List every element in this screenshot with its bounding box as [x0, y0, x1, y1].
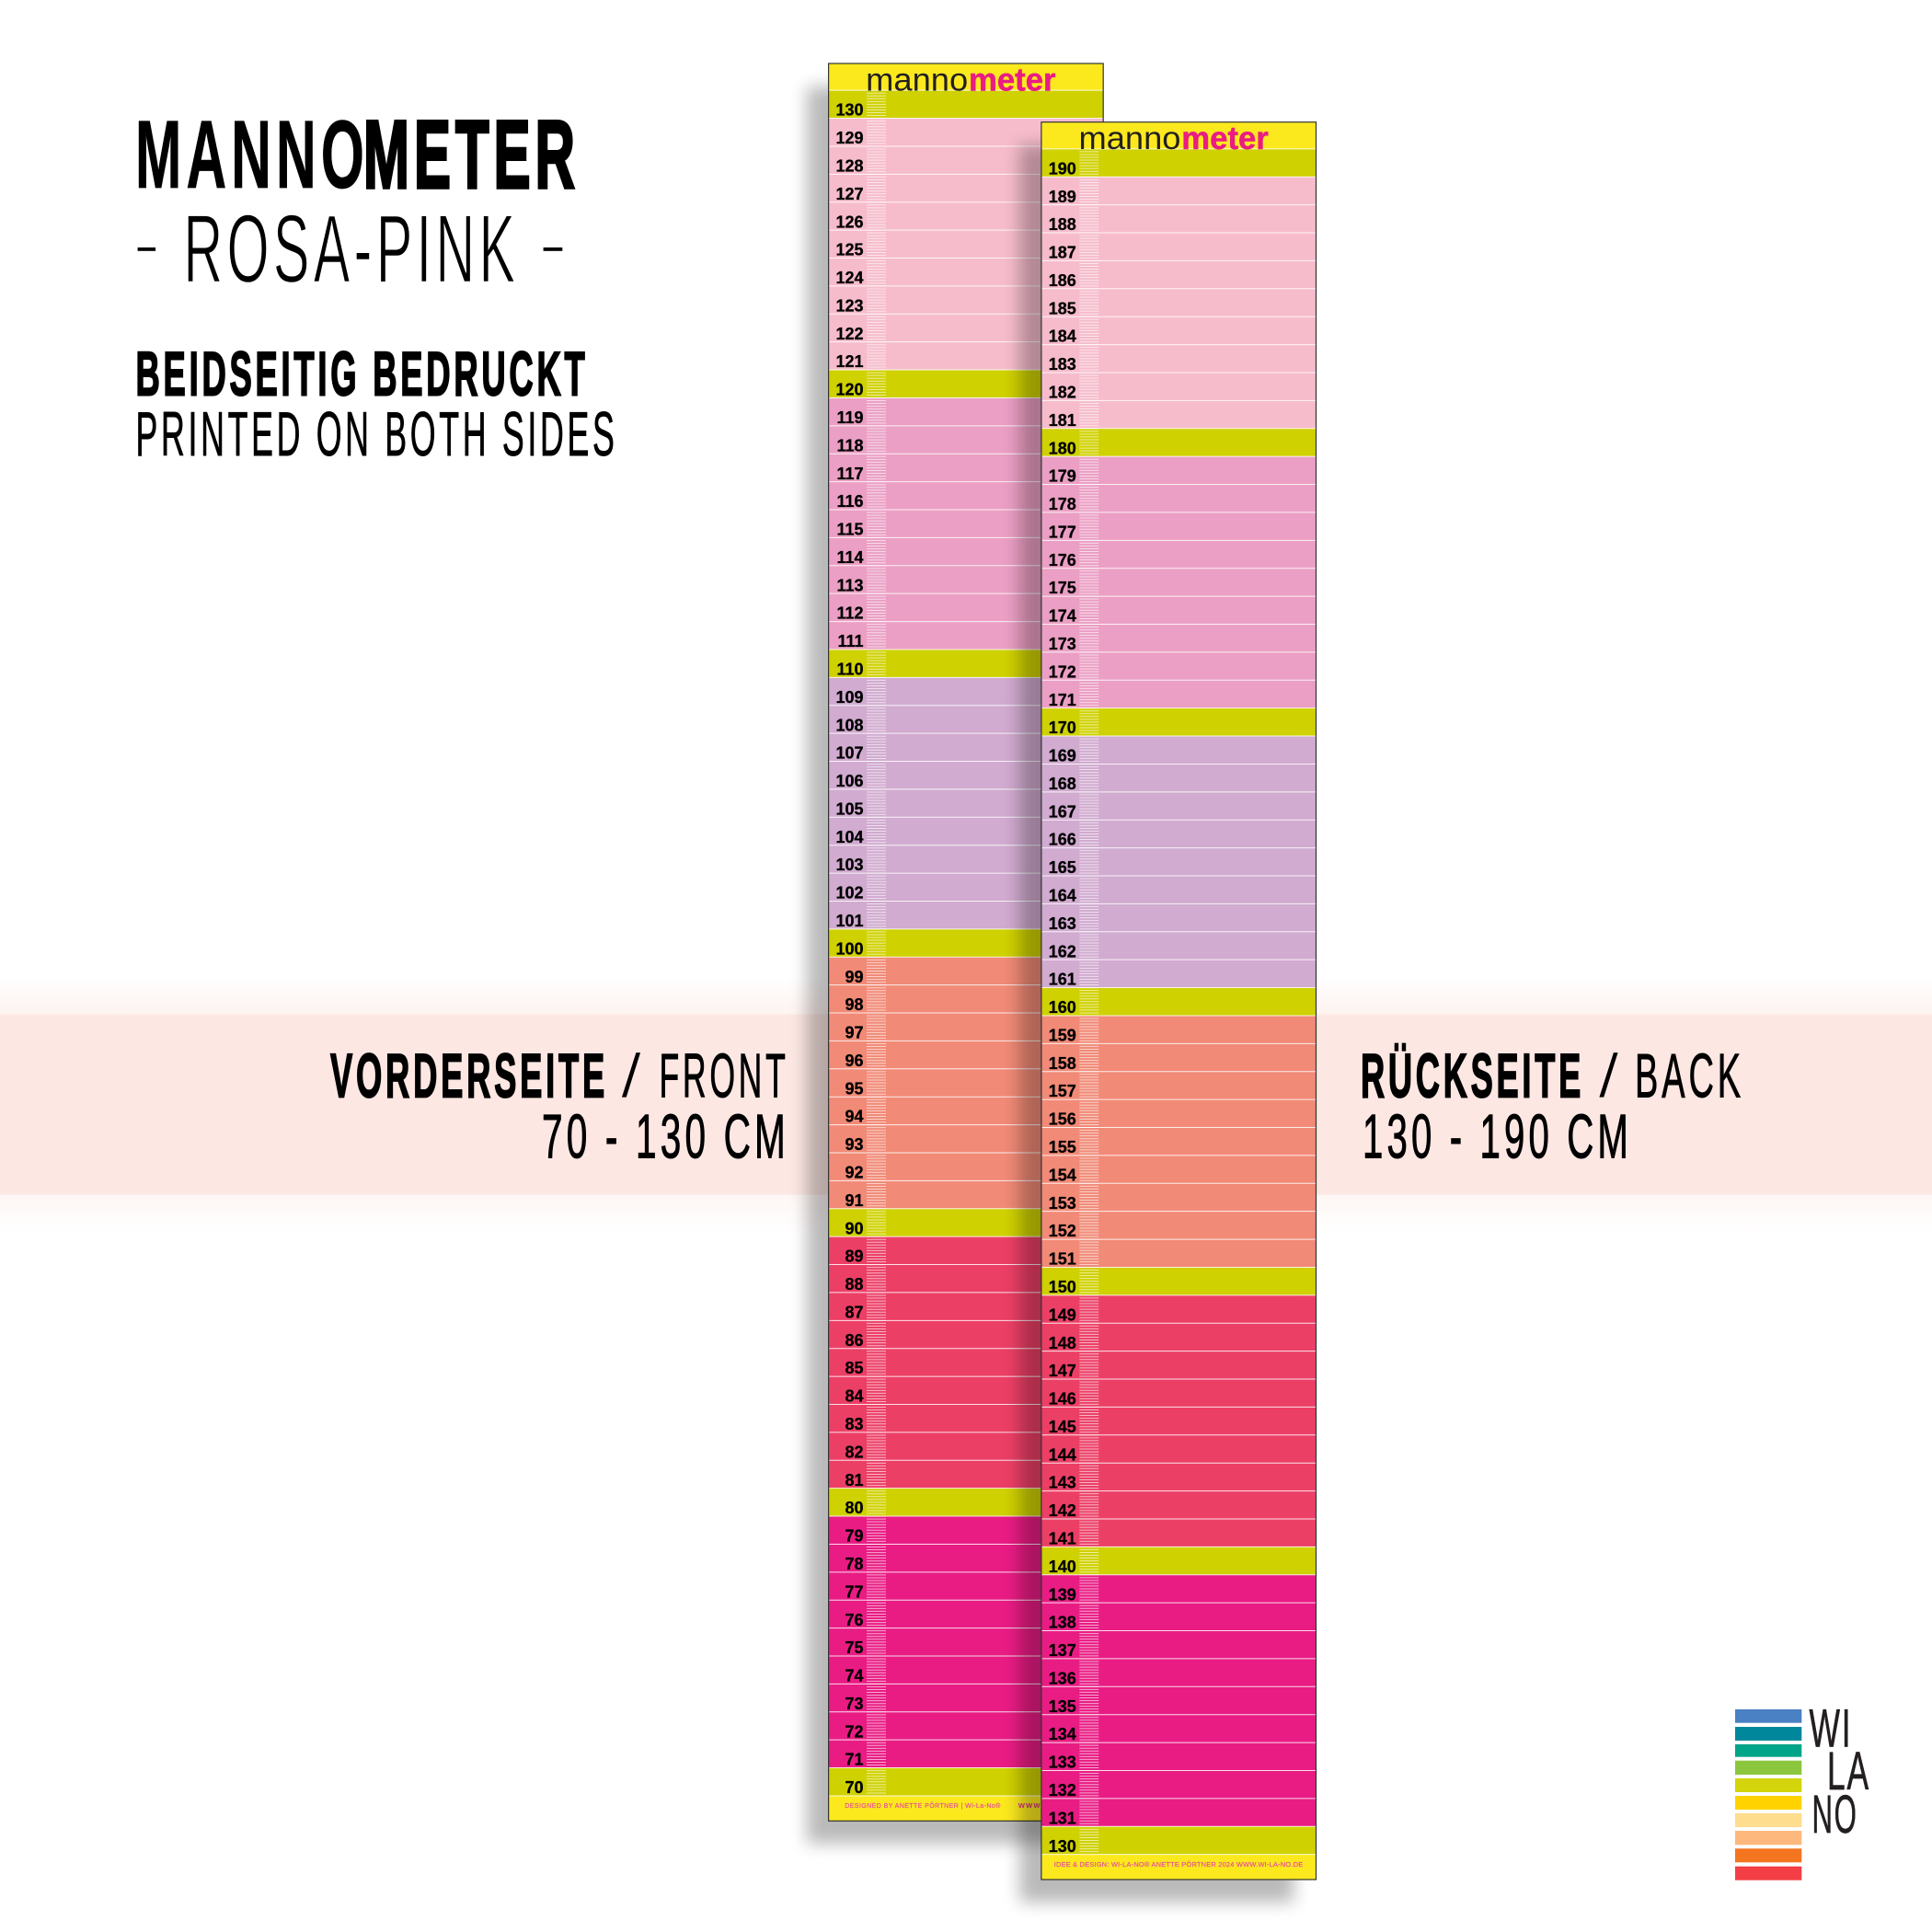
scale numbers: 190 to 130: 140: [1049, 1558, 1076, 1576]
scale numbers: 130 to 70: 104: [835, 828, 863, 846]
panel: horizontal highlight band: [0, 977, 1932, 1234]
scale numbers: 190 to 130: 148: [1049, 1334, 1076, 1352]
scale numbers: 190 to 130: 157: [1049, 1082, 1076, 1100]
scale numbers: 130 to 70: 81: [845, 1471, 863, 1489]
scale numbers: 190 to 130: 156: [1049, 1110, 1076, 1129]
scale numbers: 130 to 70: 112: [836, 604, 863, 623]
scale numbers: 130 to 70: 83: [845, 1415, 863, 1433]
logo: back mannometer: [1078, 121, 1269, 156]
band: 90 lime: [829, 1209, 1103, 1236]
scale numbers: 190 to 130: 172: [1049, 662, 1076, 681]
scale numbers: 190 to 130: 139: [1049, 1585, 1076, 1604]
scale numbers: 190 to 130: 144: [1049, 1445, 1076, 1464]
scale numbers: 130 to 70: 98: [845, 995, 863, 1014]
title: MANNOMETER: MANNO: [135, 101, 369, 209]
logo wordmark: LA: [1827, 1742, 1870, 1801]
scale numbers: 190 to 130: 130: [1049, 1837, 1076, 1856]
label: back range: 130 - 190 CM: [1363, 1102, 1632, 1172]
scale numbers: 130 to 70: 108: [835, 716, 863, 734]
label: front range: 70 - 130 CM: [542, 1102, 789, 1172]
band: 110 lime: [829, 650, 1103, 677]
scale numbers: 130 to 70: 76: [845, 1611, 863, 1629]
scale numbers: 190 to 130: 159: [1049, 1026, 1076, 1044]
logo: front mannometer: meter: [969, 63, 1056, 98]
scale numbers: 130 to 70: 115: [836, 521, 863, 539]
scale numbers: 130 to 70: 130: [835, 101, 863, 120]
scale numbers: 130 to 70: 73: [845, 1695, 863, 1713]
scale numbers: 190 to 130: 131: [1049, 1809, 1076, 1827]
scale numbers: 190 to 130: 145: [1049, 1418, 1076, 1436]
scale numbers: 190 to 130: 174: [1049, 607, 1076, 626]
strip header: front: [829, 63, 1103, 90]
scale numbers: 190 to 130: 151: [1049, 1250, 1076, 1269]
scale numbers: 130 to 70: 74: [845, 1667, 863, 1685]
scale numbers: 190 to 130: 154: [1049, 1166, 1076, 1184]
scale numbers: 130 to 70: 102: [835, 884, 863, 903]
band: 130 lime: [829, 90, 1103, 118]
logo: WI LA NO: [1735, 1698, 1870, 1880]
logo: front mannometer: [866, 63, 1056, 98]
band: 81-89 red: [829, 1236, 1103, 1489]
scale numbers: 130 to 70: 106: [835, 772, 863, 790]
scale numbers: 130 to 70: 105: [835, 799, 863, 818]
scale numbers: 190 to 130: 136: [1049, 1669, 1076, 1687]
scale numbers: 130 to 70: 110: [836, 660, 863, 678]
band: 181-189 light pink: [1041, 177, 1316, 429]
scale numbers: 190 to 130: 185: [1049, 299, 1076, 317]
scale numbers: 130 to 70: 82: [845, 1443, 863, 1461]
scale numbers: 130 to 70: 101: [835, 912, 863, 930]
scale numbers: 130 to 70: 87: [845, 1303, 863, 1321]
scale numbers: 130 to 70: 128: [835, 156, 863, 175]
scale numbers: 190 to 130: 170: [1049, 719, 1076, 737]
scale numbers: 190 to 130: 135: [1049, 1697, 1076, 1716]
scale numbers: 190 to 130: 173: [1049, 635, 1076, 653]
icon: rainbow bars: [1735, 1709, 1801, 1880]
band: 111-119 pink: [829, 397, 1103, 650]
scale numbers: 190 to 130: 132: [1049, 1781, 1076, 1800]
scale numbers: 190 to 130: 183: [1049, 355, 1076, 374]
band: 70 lime: [829, 1767, 1103, 1796]
scale numbers: 130 to 70: 127: [835, 185, 863, 203]
band: 131-139 magenta: [1041, 1575, 1316, 1826]
logo: front mannometer: manno: [866, 63, 968, 98]
scale numbers: 190 to 130: 162: [1049, 942, 1076, 960]
scale numbers: 190 to 130: 186: [1049, 271, 1076, 290]
scale numbers: 130 to 70: 75: [845, 1639, 863, 1657]
scale numbers: 130 to 70: 91: [845, 1191, 863, 1210]
shadow: back strip: [1019, 145, 1294, 1903]
strip border: back: [1041, 122, 1316, 1880]
scale numbers: 130 to 70: 89: [845, 1248, 863, 1266]
scale numbers: 130 to 70: 116: [836, 492, 863, 511]
scale numbers: 130 to 70: 119: [836, 408, 863, 427]
scale numbers: 130 to 70: 126: [835, 213, 863, 231]
scale numbers: 190 to 130: 166: [1049, 831, 1076, 849]
footer url: front: WWW.WI-LA-NO.DE: [1018, 1801, 1100, 1810]
scale numbers: 190 to 130: 184: [1049, 328, 1076, 346]
heading: PRINTED ON BOTH SIDES: PRINTED ON BOTH SIDES: [136, 399, 618, 469]
scale numbers: 190 to 130: 155: [1049, 1138, 1076, 1156]
scale numbers: 130 to 70: 72: [845, 1722, 863, 1741]
scale numbers: 190 to 130: 171: [1049, 691, 1076, 709]
scale numbers: 130 to 70: 99: [845, 968, 863, 986]
scale numbers: 130 to 70: 125: [835, 241, 863, 259]
scale numbers: 130 to 70: 120: [835, 381, 863, 399]
scale numbers: 190 to 130: 178: [1049, 495, 1076, 513]
band: 151-159 salmon: [1041, 1016, 1316, 1267]
panel: back height chart 130-190 cm: [1019, 121, 1316, 1903]
label: back side: BACK: [1635, 1041, 1744, 1111]
scale numbers: 130 to 70: 97: [845, 1024, 863, 1042]
band: 161-169 lilac: [1041, 736, 1316, 987]
scale numbers: 190 to 130: 164: [1049, 887, 1076, 905]
scale numbers: 130 to 70: 107: [835, 744, 863, 763]
band: 100 lime: [829, 929, 1103, 957]
logo wordmark: NO: [1812, 1785, 1858, 1845]
band: 101-109 lilac: [829, 677, 1103, 929]
scale numbers: 190 to 130: 149: [1049, 1305, 1076, 1324]
band: 80 lime: [829, 1489, 1103, 1516]
scale numbers: 190 to 130: 163: [1049, 914, 1076, 933]
panel: front height chart 70-130 cm: [807, 63, 1103, 1844]
logo: back mannometer: meter: [1181, 121, 1269, 156]
scale numbers: 130 to 70: 77: [845, 1582, 863, 1601]
scale numbers: 130 to 70: 117: [836, 465, 863, 483]
scale numbers: 130 to 70: 118: [836, 436, 863, 454]
scale numbers: 190 to 130: 142: [1049, 1501, 1076, 1520]
scale numbers: 130 to 70: 95: [845, 1079, 863, 1098]
scale numbers: 190 to 130: 167: [1049, 802, 1076, 821]
scale numbers: 190 to 130: [1049, 159, 1076, 1856]
scale numbers: 130 to 70: 122: [835, 325, 863, 343]
scale numbers: 190 to 130: 133: [1049, 1754, 1076, 1772]
label: back side: /: [1599, 1041, 1619, 1111]
millimetre ticks: back: [1079, 151, 1098, 1854]
band: 120 lime: [829, 370, 1103, 397]
band: 130 lime: [1041, 1826, 1316, 1854]
scale numbers: 130 to 70: 85: [845, 1359, 863, 1377]
band: 170 lime: [1041, 708, 1316, 736]
shadow: front strip: [807, 86, 1081, 1844]
scale numbers: 130 to 70: 90: [845, 1219, 863, 1237]
strip footer: front: [829, 1796, 1103, 1821]
band: 71-79 magenta: [829, 1516, 1103, 1767]
scale numbers: 130 to 70: [835, 101, 863, 1797]
scale numbers: 130 to 70: 84: [845, 1387, 863, 1406]
strip header: back: [1041, 122, 1316, 149]
band: 171-179 pink: [1041, 456, 1316, 708]
scale numbers: 190 to 130: 176: [1049, 551, 1076, 569]
scale numbers: 190 to 130: 182: [1049, 384, 1076, 402]
scale numbers: 190 to 130: 179: [1049, 467, 1076, 486]
band: 160 lime: [1041, 987, 1316, 1016]
scale numbers: 190 to 130: 177: [1049, 523, 1076, 541]
scale numbers: 190 to 130: 180: [1049, 439, 1076, 457]
scale numbers: 190 to 130: 160: [1049, 998, 1076, 1017]
heading: BEIDSEITIG BEDRUCKT: BEIDSEITIG BEDRUCKT: [136, 339, 589, 408]
scale numbers: 130 to 70: 100: [835, 939, 863, 958]
scale numbers: 190 to 130: 152: [1049, 1222, 1076, 1240]
scale numbers: 190 to 130: 168: [1049, 775, 1076, 793]
band: 141-149 red: [1041, 1295, 1316, 1547]
scale numbers: 130 to 70: 94: [845, 1108, 863, 1126]
scale numbers: 190 to 130: 150: [1049, 1278, 1076, 1296]
scale numbers: 190 to 130: 187: [1049, 244, 1076, 262]
label: front side: VORDERSEITE: [330, 1041, 608, 1111]
subtitle: ROSA-PINK: [138, 196, 562, 304]
label: back side: RÜCKSEITE: [1361, 1041, 1584, 1111]
strip footer: back: [1041, 1854, 1316, 1880]
scale numbers: 130 to 70: 78: [845, 1555, 863, 1573]
scale numbers: 130 to 70: 96: [845, 1052, 863, 1070]
scale numbers: 190 to 130: 188: [1049, 215, 1076, 234]
scale numbers: 130 to 70: 80: [845, 1499, 863, 1517]
band: 190 lime: [1041, 149, 1316, 177]
scale numbers: 130 to 70: 121: [835, 352, 863, 371]
band: 121-129 light pink: [829, 118, 1103, 370]
logo wordmark: WI: [1809, 1698, 1853, 1758]
label: front side: FRONT: [659, 1041, 789, 1111]
band: 140 lime: [1041, 1547, 1316, 1575]
scale numbers: 130 to 70: 124: [835, 269, 863, 287]
footer credit: front: DESIGNED BY ANETTE PÖRTNER | Wi-La-No®: [845, 1802, 1001, 1810]
scale numbers: 130 to 70: 103: [835, 856, 863, 874]
scale numbers: 190 to 130: 147: [1049, 1362, 1076, 1380]
scale numbers: 190 to 130: 190: [1049, 159, 1076, 178]
scale numbers: 130 to 70: 70: [845, 1778, 863, 1797]
millimetre ticks: front: [867, 93, 886, 1795]
scale numbers: 190 to 130: 143: [1049, 1474, 1076, 1492]
scale numbers: 190 to 130: 141: [1049, 1530, 1076, 1548]
scale numbers: 190 to 130: 137: [1049, 1641, 1076, 1660]
scale numbers: 130 to 70: 79: [845, 1527, 863, 1546]
scale numbers: 130 to 70: 86: [845, 1331, 863, 1350]
scale numbers: 190 to 130: 158: [1049, 1054, 1076, 1073]
title: MANNOMETER: METER: [363, 101, 580, 209]
scale numbers: 130 to 70: 123: [835, 296, 863, 315]
scale numbers: 190 to 130: 181: [1049, 411, 1076, 430]
scale numbers: 190 to 130: 175: [1049, 579, 1076, 597]
scale numbers: 130 to 70: 92: [845, 1164, 863, 1182]
subtitle: ROSA-PINK: ROSA-PINK: [184, 196, 519, 304]
scale numbers: 130 to 70: 129: [835, 129, 863, 147]
band: 180 lime: [1041, 429, 1316, 456]
scale numbers: 130 to 70: 111: [837, 632, 863, 650]
logo wordmark: [1809, 1698, 1870, 1845]
scale numbers: 190 to 130: 146: [1049, 1390, 1076, 1409]
scale numbers: 190 to 130: 134: [1049, 1725, 1076, 1743]
scale numbers: 190 to 130: 153: [1049, 1194, 1076, 1213]
scale numbers: 190 to 130: 161: [1049, 971, 1076, 989]
scale numbers: 190 to 130: 165: [1049, 858, 1076, 877]
footer credit: back: IDEE & DESIGN: WI-LA-NO® ANETTE PÖRTNER 2024 WWW.WI-LA-NO.DE: [1054, 1860, 1303, 1869]
scale numbers: 130 to 70: 114: [836, 548, 863, 567]
logo: back mannometer: manno: [1079, 121, 1180, 156]
band: 91-99 salmon: [829, 957, 1103, 1209]
scale numbers: 130 to 70: 71: [845, 1751, 863, 1769]
scale numbers: 130 to 70: 109: [835, 688, 863, 707]
scale numbers: 190 to 130: 169: [1049, 747, 1076, 765]
scale numbers: 130 to 70: 93: [845, 1135, 863, 1154]
label: front side: /: [621, 1041, 641, 1111]
scale numbers: 190 to 130: 189: [1049, 188, 1076, 206]
scale numbers: 130 to 70: 113: [836, 576, 863, 594]
band: 150 lime: [1041, 1267, 1316, 1295]
strip border: front: [829, 63, 1103, 1821]
scale numbers: 130 to 70: 88: [845, 1275, 863, 1294]
scale numbers: 190 to 130: 138: [1049, 1614, 1076, 1632]
